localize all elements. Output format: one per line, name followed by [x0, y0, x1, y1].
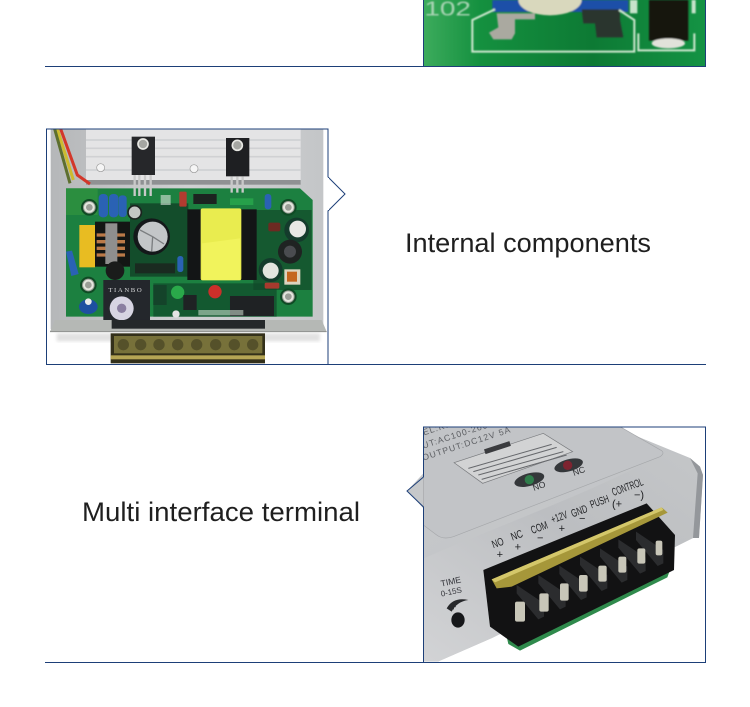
blue potentiometer base — [492, 0, 628, 12]
indicator NC — [553, 456, 586, 478]
enclosure top face — [400, 427, 703, 662]
model text lines: EL:K90 — [422, 417, 457, 437]
indicator NO: NO — [531, 479, 547, 493]
terminal labels: − — [537, 533, 543, 545]
silver lead — [489, 13, 535, 39]
transistor left — [132, 137, 155, 196]
caution sticker — [454, 433, 573, 483]
terminal block — [483, 503, 675, 651]
blue capacitors — [66, 194, 271, 276]
green LED — [171, 286, 184, 299]
transistor right — [226, 138, 249, 193]
embossed label panel — [423, 427, 663, 538]
indicator NO — [513, 470, 547, 493]
heat sink — [86, 129, 301, 183]
terminal labels: + — [497, 549, 503, 561]
blue trimmer — [79, 299, 98, 314]
terminal labels: PUSH — [589, 493, 611, 511]
bevel on right edge — [690, 458, 703, 538]
divider line: top — [45, 66, 705, 67]
relay: TIANBO — [108, 287, 142, 294]
terminal labels: COM — [529, 520, 550, 537]
indicator NC: NC — [571, 464, 586, 478]
large capacitor — [133, 218, 170, 255]
terminal labels: −) — [634, 490, 644, 502]
metal enclosure — [51, 129, 323, 329]
inductor — [95, 222, 130, 267]
model text lines: UT:AC100-260 — [421, 420, 489, 451]
relay — [103, 280, 150, 320]
panel: internal components photo — [47, 129, 328, 364]
transformer — [187, 208, 257, 280]
red film part — [179, 192, 187, 207]
small capacitor — [128, 206, 141, 219]
yellow X capacitor — [79, 225, 95, 267]
time adjust marking: + — [451, 603, 457, 614]
time adjust marking: TIME — [440, 574, 462, 589]
diode outline — [638, 33, 694, 50]
divider line: middle — [46, 364, 706, 365]
panel: top circuit board photo — [424, 0, 705, 66]
dark lead — [582, 9, 623, 37]
wires — [55, 129, 90, 184]
terminal labels: − — [579, 513, 585, 525]
terminal labels: CONTROL — [610, 476, 645, 499]
diode silver end — [652, 38, 685, 48]
divider line: bottom — [45, 662, 706, 663]
terminal labels: + — [559, 523, 565, 535]
enclosure front face — [424, 538, 693, 662]
heading: multi interface terminal: Multi interface terminal — [82, 497, 360, 527]
terminal labels: (+ — [612, 498, 622, 510]
terminal labels: + — [515, 542, 521, 554]
model text lines: OUTPUT:DC12V 5A — [421, 424, 512, 463]
terminal labels: NO — [490, 536, 506, 551]
time adjust marking — [440, 574, 468, 628]
terminal strip — [111, 333, 265, 363]
right-side capacitors — [259, 218, 309, 289]
terminal labels — [490, 476, 645, 561]
panel: multi interface terminal photo — [400, 417, 705, 662]
red LED — [208, 285, 222, 298]
adjust hole — [451, 612, 465, 628]
screws — [81, 200, 296, 304]
photo frame with left notch arrow — [407, 427, 706, 662]
metal bottom flange — [50, 320, 327, 332]
heading: internal components: Internal components — [405, 228, 651, 258]
black diode — [649, 0, 688, 41]
green circuit board — [66, 188, 313, 317]
potentiometer dial — [518, 0, 582, 15]
terminal labels: +12V — [550, 509, 570, 526]
black header connector — [230, 296, 274, 316]
time adjust marking: 0-15S — [440, 585, 463, 599]
board outline marks — [472, 9, 634, 52]
terminal labels: NC — [509, 528, 525, 543]
photo frame with right notch arrow — [46, 129, 345, 364]
terminal labels: GND — [570, 503, 589, 520]
